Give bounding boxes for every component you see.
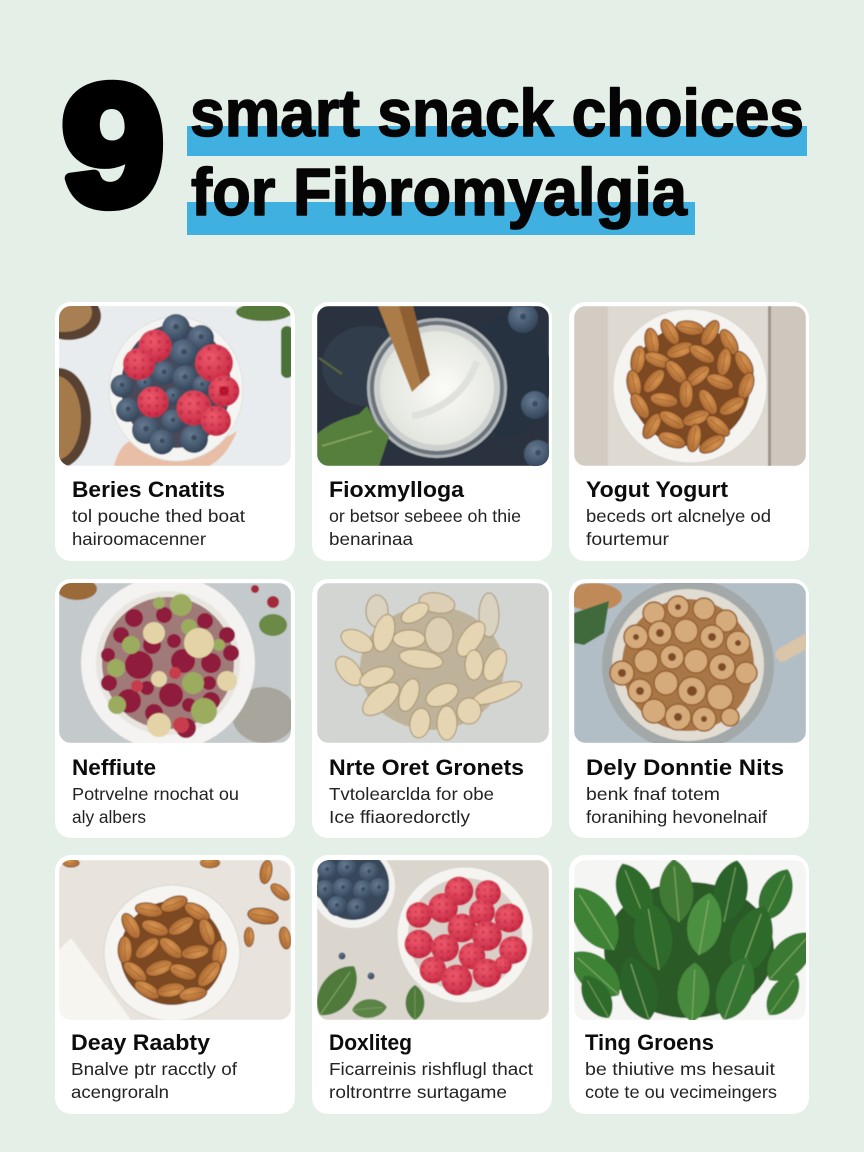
card 4: fruit mix (55, 576, 296, 838)
card text (329, 784, 494, 827)
card 9: greens (558, 855, 824, 1114)
card text (329, 1059, 533, 1102)
card title: Yogut Yogurt (586, 477, 729, 502)
card 6: cereal (566, 579, 815, 838)
card text: benarinaa (329, 529, 413, 549)
image: bowl of ring cereal (574, 583, 806, 743)
card text (586, 784, 767, 827)
card text: roltrontrre surtagame (329, 1082, 507, 1102)
card title: Ting Groens (585, 1030, 714, 1055)
card text: hairoomacenner (72, 529, 206, 549)
image: bowl of mixed fruit (59, 583, 291, 743)
image: spinach leaves (574, 860, 806, 1020)
card 1: berries (55, 302, 295, 561)
card text: tol pouche thed boat (72, 506, 245, 526)
image: pile of pale nuts (317, 583, 549, 743)
card text: Ice ffiaoredorctly (329, 807, 470, 827)
card text: Potrvelne rnochat ou (72, 784, 239, 804)
card text: benk fnaf totem (586, 784, 720, 804)
card text: acengroraln (71, 1082, 169, 1102)
card title: Doxliteg (329, 1030, 412, 1055)
card text (586, 506, 771, 549)
image: bowl of almonds on wood (574, 306, 806, 466)
card text: foranihing hevonelnaif (586, 807, 767, 827)
card text: Tvtolearclda for obe (329, 784, 494, 804)
card title: Nrte Oret Gronets (329, 755, 524, 780)
card text: Ficarreinis rishflugl thact (329, 1059, 533, 1079)
card 2: yogurt (312, 302, 552, 561)
card text (585, 1059, 777, 1102)
card text: aly albers (72, 807, 146, 827)
highlight bar line 2 (187, 202, 695, 235)
image: white bowl of almonds (59, 858, 292, 1021)
image: jar of yogurt (317, 303, 552, 468)
header (62, 51, 807, 241)
card title: Dely Donntie Nits (586, 755, 784, 780)
card text (72, 784, 239, 827)
card text: or betsor sebeee oh thie (329, 506, 521, 526)
card text (72, 506, 245, 549)
card text: Bnalve ptr racctly of (71, 1059, 237, 1079)
number 9: 9 (62, 51, 164, 241)
card text (71, 1059, 237, 1102)
card 8: raspberries (307, 844, 552, 1114)
card text: be thiutive ms hesauit (585, 1059, 775, 1079)
card text (329, 506, 521, 549)
card 5: pale nuts (312, 579, 552, 838)
card title: Deay Raabty (71, 1030, 211, 1055)
card title: Fioxmylloga (329, 477, 465, 502)
card text: cote te ou vecimeingers (585, 1082, 777, 1102)
image: bowls of raspberries and blueberries (317, 860, 549, 1020)
highlight bar line 1 (187, 126, 807, 156)
card text: beceds ort alcnelye od (586, 506, 771, 526)
image: bowl of berries (59, 306, 291, 466)
card text: fourtemur (586, 529, 669, 549)
card 7: almonds bowl (55, 855, 295, 1114)
card title: Beries Cnatits (72, 477, 225, 502)
title line 2: for Fibromyalgia (191, 155, 688, 230)
card title: Neffiute (72, 755, 156, 780)
title line 1: smart snack choices (190, 76, 804, 151)
card 3: almonds (569, 302, 809, 561)
